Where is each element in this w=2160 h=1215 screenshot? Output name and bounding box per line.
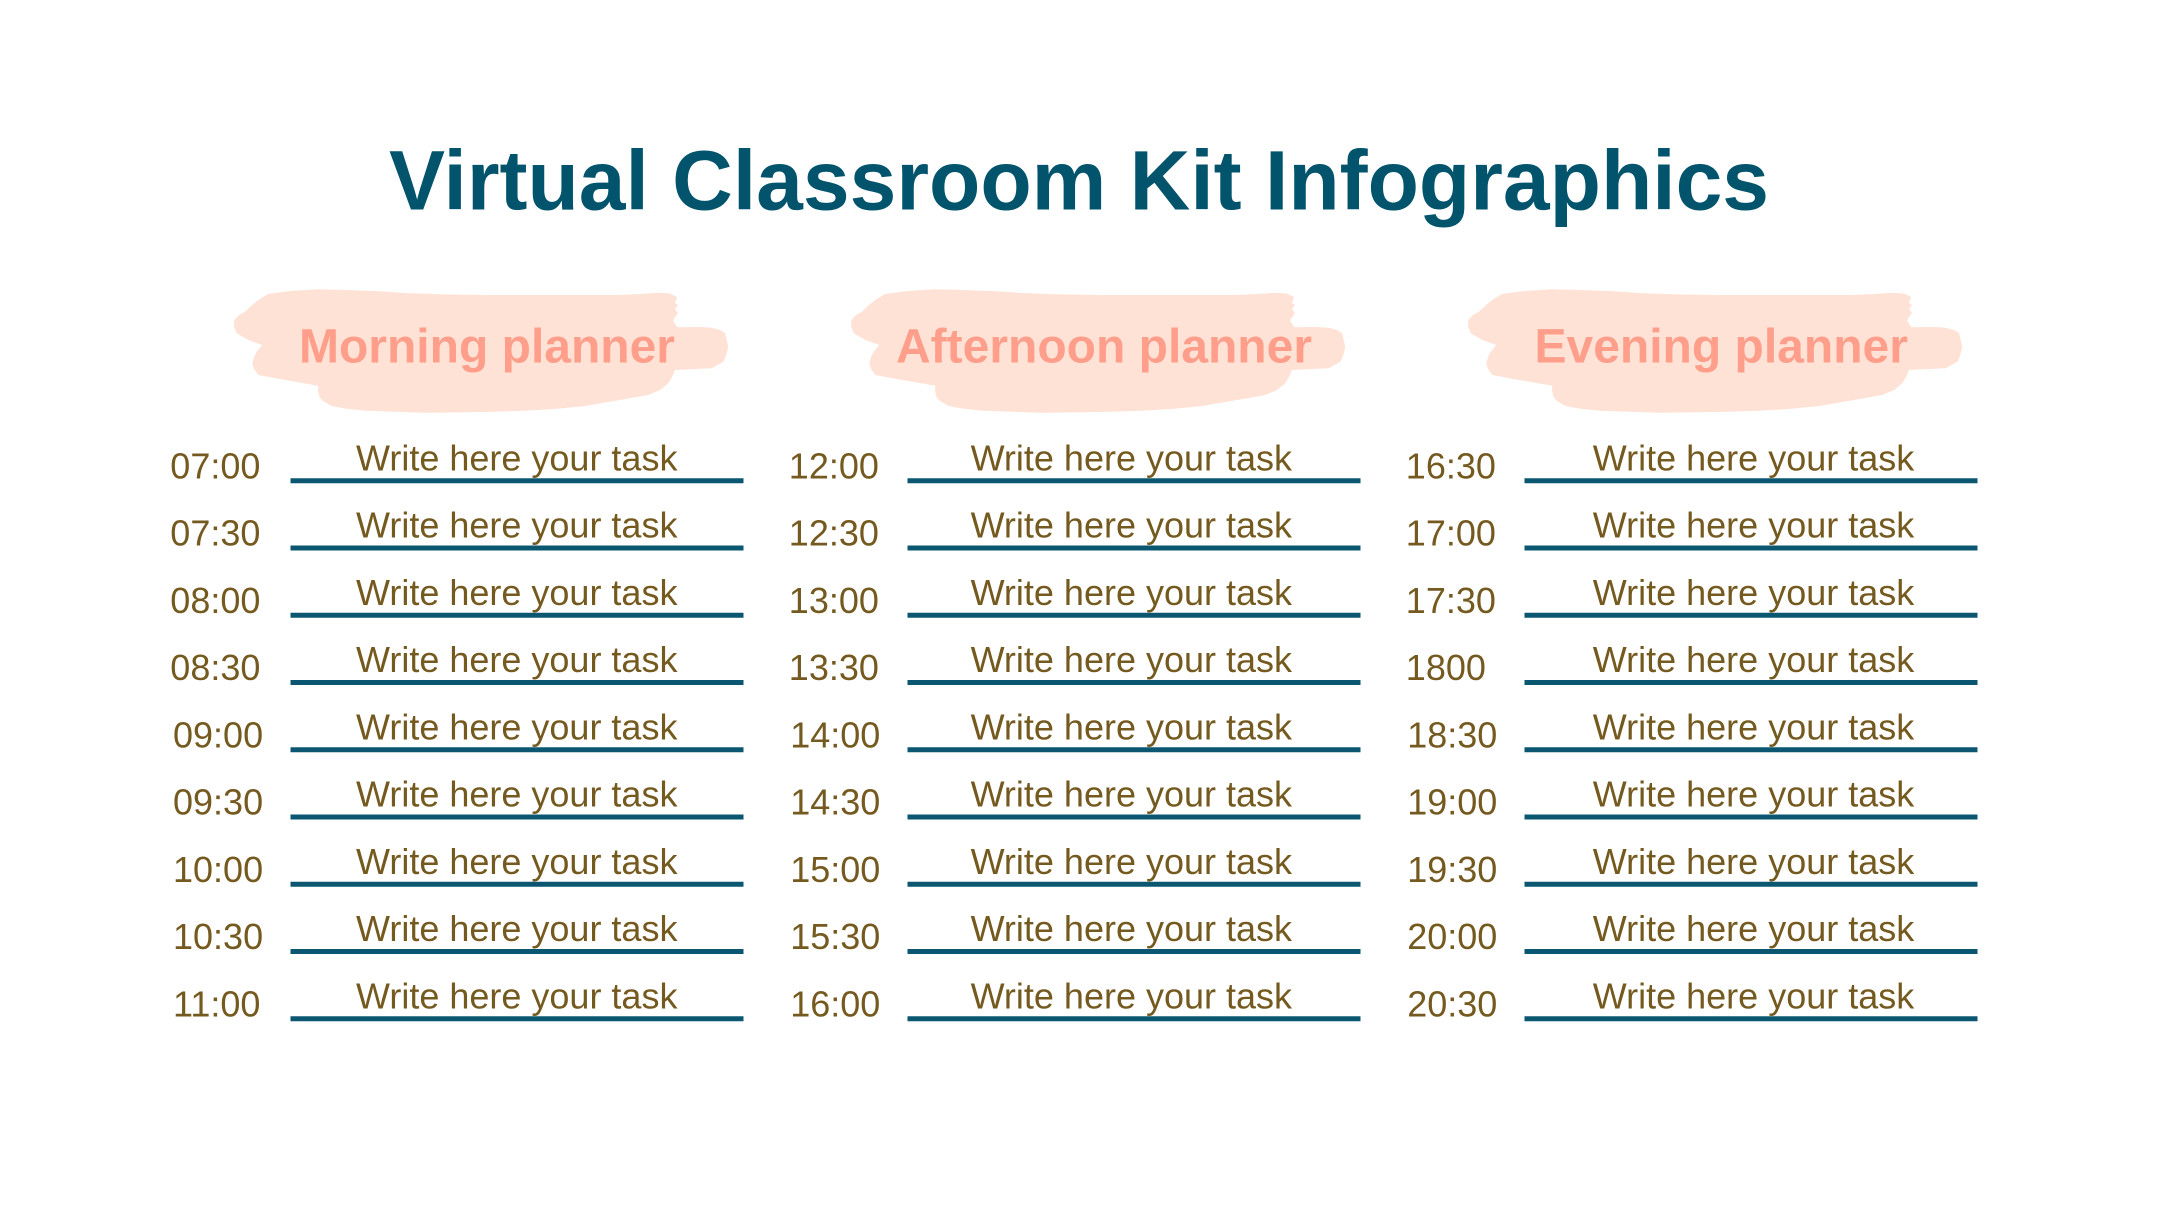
row 09:30: 09:30 xyxy=(173,782,263,823)
row 20:00 xyxy=(1407,908,1978,957)
heading: evening planner: Evening planner xyxy=(1534,320,1908,373)
row 19:00: Write here your task xyxy=(1593,774,1915,815)
row 13:00: Write here your task xyxy=(971,572,1293,613)
row 08:30: 08:30 xyxy=(170,647,260,688)
row 11:00 xyxy=(173,975,744,1024)
row 12:00 xyxy=(789,437,1360,486)
row 17:00 xyxy=(1406,505,1978,554)
row 15:30 xyxy=(790,908,1360,957)
row 17:30: 17:30 xyxy=(1406,580,1496,621)
row 19:00: 19:00 xyxy=(1407,782,1497,823)
heading: afternoon planner: Afternoon planner xyxy=(896,320,1312,373)
heading: evening planner xyxy=(1468,289,1962,413)
row 09:30: Write here your task xyxy=(356,774,678,815)
row 18:30 xyxy=(1407,706,1978,755)
row 14:30 xyxy=(790,774,1360,823)
panel: afternoon planner xyxy=(789,289,1360,1024)
row 1800: 1800 xyxy=(1406,647,1486,688)
row 18:30: Write here your task xyxy=(1593,706,1915,747)
row 15:30: 15:30 xyxy=(790,916,880,957)
row 17:30 xyxy=(1406,572,1978,621)
row 14:30: 14:30 xyxy=(790,782,880,823)
row 14:00 xyxy=(790,706,1360,755)
row 15:00: Write here your task xyxy=(971,841,1293,882)
row 12:30: Write here your task xyxy=(971,505,1293,546)
row 14:00: 14:00 xyxy=(790,714,880,755)
title: Virtual Classroom Kit Infographics xyxy=(389,134,1769,228)
row 11:00: Write here your task xyxy=(356,975,678,1016)
row 10:00: Write here your task xyxy=(356,841,678,882)
row 14:30: Write here your task xyxy=(971,774,1293,815)
row 20:30: 20:30 xyxy=(1407,983,1497,1024)
row 18:30: 18:30 xyxy=(1407,714,1497,755)
row 13:30: Write here your task xyxy=(971,639,1293,680)
row 07:30: Write here your task xyxy=(356,505,678,546)
row 17:00: 17:00 xyxy=(1406,513,1496,554)
heading: afternoon planner xyxy=(851,289,1345,413)
row 07:00: 07:00 xyxy=(170,445,260,486)
row 16:00: Write here your task xyxy=(971,975,1293,1016)
row 09:00: 09:00 xyxy=(173,714,263,755)
heading: morning planner: Morning planner xyxy=(299,320,675,373)
row 16:30: 16:30 xyxy=(1406,445,1496,486)
row 20:00: 20:00 xyxy=(1407,916,1497,957)
row 09:00 xyxy=(173,706,744,755)
row 19:30: 19:30 xyxy=(1407,849,1497,890)
row 10:00: 10:00 xyxy=(173,849,263,890)
row 08:30: Write here your task xyxy=(356,639,678,680)
row 16:00 xyxy=(790,975,1360,1024)
row 07:00: Write here your task xyxy=(356,437,678,478)
row 1800 xyxy=(1406,639,1978,688)
row 19:00 xyxy=(1407,774,1978,823)
row 20:30: Write here your task xyxy=(1593,975,1915,1016)
row 15:00 xyxy=(790,841,1360,890)
row 16:30: Write here your task xyxy=(1593,437,1915,478)
row 17:30: Write here your task xyxy=(1593,572,1915,613)
row 15:30: Write here your task xyxy=(971,908,1293,949)
heading: morning planner xyxy=(234,289,728,413)
row 17:00: Write here your task xyxy=(1593,505,1915,546)
row 11:00: 11:00 xyxy=(173,983,260,1024)
row 08:00: 08:00 xyxy=(170,580,260,621)
panel: morning planner xyxy=(170,289,744,1024)
row 13:30 xyxy=(789,639,1360,688)
row 08:00: Write here your task xyxy=(356,572,678,613)
panel: evening planner xyxy=(1406,289,1978,1024)
row 10:30 xyxy=(173,908,744,957)
row 19:30: Write here your task xyxy=(1593,841,1915,882)
row 13:00: 13:00 xyxy=(789,580,879,621)
row 13:30: 13:30 xyxy=(789,647,879,688)
row 20:30 xyxy=(1407,975,1978,1024)
row 07:30 xyxy=(170,505,744,554)
row 1800: Write here your task xyxy=(1593,639,1915,680)
row 10:30: 10:30 xyxy=(173,916,263,957)
row 08:00 xyxy=(170,572,744,621)
row 10:00 xyxy=(173,841,744,890)
row 07:30: 07:30 xyxy=(170,513,260,554)
row 10:30: Write here your task xyxy=(356,908,678,949)
row 12:30 xyxy=(789,505,1360,554)
row 12:30: 12:30 xyxy=(789,513,879,554)
row 08:30 xyxy=(170,639,744,688)
row 12:00: Write here your task xyxy=(971,437,1293,478)
row 16:30 xyxy=(1406,437,1978,486)
row 16:00: 16:00 xyxy=(790,983,880,1024)
row 13:00 xyxy=(789,572,1360,621)
row 09:30 xyxy=(173,774,744,823)
row 15:00: 15:00 xyxy=(790,849,880,890)
row 20:00: Write here your task xyxy=(1593,908,1915,949)
row 12:00: 12:00 xyxy=(789,445,879,486)
row 19:30 xyxy=(1407,841,1978,890)
row 09:00: Write here your task xyxy=(356,706,678,747)
row 07:00 xyxy=(170,437,744,486)
row 14:00: Write here your task xyxy=(971,706,1293,747)
